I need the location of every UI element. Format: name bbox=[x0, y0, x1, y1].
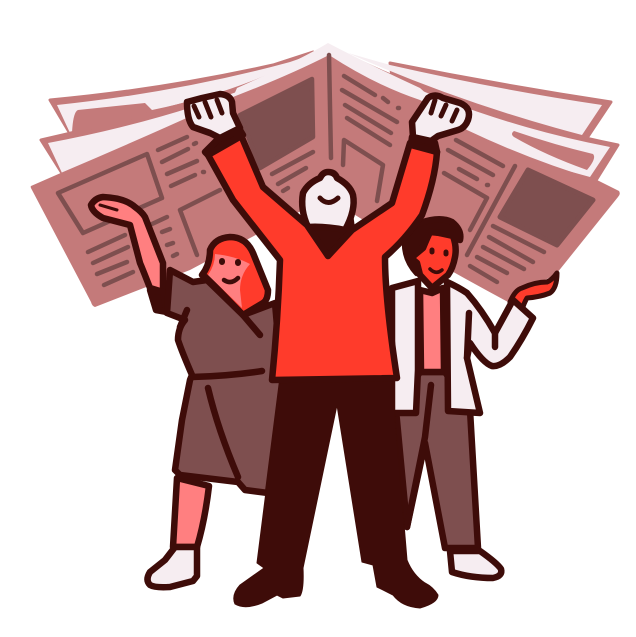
centre man: left fist bbox=[187, 94, 240, 138]
dark image block upper left bbox=[240, 79, 313, 168]
text lines bbox=[88, 55, 544, 285]
right man: coat bbox=[392, 281, 533, 413]
right man: hand bbox=[510, 273, 557, 310]
right man: eyes and smile bbox=[430, 250, 446, 272]
back right sheet bbox=[348, 53, 611, 138]
column brackets bbox=[180, 140, 487, 255]
woman: eyes and smile bbox=[222, 261, 238, 282]
middle right sheet bbox=[340, 52, 618, 182]
right man: shoe bbox=[450, 551, 501, 578]
woman: dress bbox=[167, 270, 282, 493]
page content: columns, image blocks and text lines bbox=[58, 55, 593, 285]
right man: shirt bbox=[420, 288, 444, 372]
centre man: head bbox=[302, 172, 354, 230]
woman: dress folds bbox=[180, 310, 262, 477]
middle left sheet bbox=[41, 53, 335, 178]
woman: shoe bbox=[148, 547, 197, 587]
right man: hair bbox=[405, 219, 460, 273]
right man: coat folds bbox=[467, 313, 495, 358]
newspaper bbox=[31, 43, 620, 307]
right man: trouser fold bbox=[407, 385, 431, 527]
centre man: right fist bbox=[412, 96, 469, 141]
centre man: cuffs bbox=[205, 130, 437, 155]
centre man bbox=[187, 94, 469, 608]
man on the right bbox=[392, 219, 557, 578]
centre man: trousers and boots bbox=[234, 381, 438, 608]
back left sheet bbox=[50, 52, 330, 137]
woman: arm bbox=[91, 197, 163, 292]
centre man: smile bbox=[320, 198, 338, 202]
centre man: red shirt bbox=[208, 133, 437, 380]
woman: hair bbox=[202, 237, 268, 315]
woman: arm shadow bbox=[150, 290, 167, 312]
woman: face bbox=[208, 254, 250, 308]
woman: finger line bbox=[100, 205, 117, 210]
woman figure bbox=[91, 197, 282, 587]
centre man: neck bbox=[305, 215, 352, 257]
right man: face bbox=[411, 231, 456, 288]
dark image block right bbox=[500, 170, 593, 245]
right man: trousers bbox=[396, 372, 478, 548]
woman: leg bbox=[173, 478, 209, 547]
main page with white edge bbox=[31, 43, 620, 307]
image frame left bbox=[58, 154, 162, 233]
